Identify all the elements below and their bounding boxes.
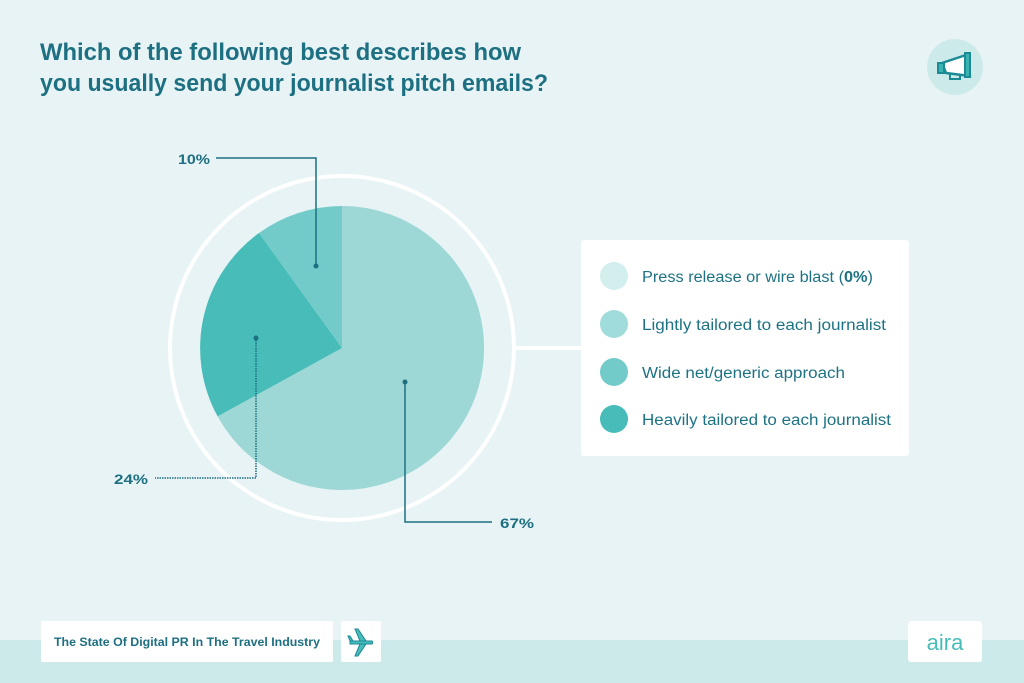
label: 67%: 67% <box>500 515 535 531</box>
label: 24%: 24% <box>114 471 149 487</box>
legend: Lightly tailored to each journalist <box>642 317 887 334</box>
label: 24% <box>114 336 258 487</box>
legend <box>581 240 909 456</box>
legend: Wide net/generic approach <box>642 365 845 382</box>
title: Which of the following best describes how <box>40 39 521 66</box>
pie chart <box>170 176 514 520</box>
label: 10%: 10% <box>178 151 211 167</box>
legend: Press release or wire blast ( 0%) <box>642 269 873 286</box>
title: you usually send your journalist pitch emails? <box>40 70 548 97</box>
legend: Heavily tailored to each journalist <box>642 412 892 429</box>
logo: aira <box>908 621 982 662</box>
icon: megaphone <box>927 39 983 95</box>
slice: heavily tailored 24% <box>200 233 342 416</box>
icon: plane <box>341 621 381 662</box>
logo: aira: aira <box>927 630 964 655</box>
title <box>40 39 548 97</box>
footer: report title: The State Of Digital PR In The Travel Industry <box>54 635 320 649</box>
label: 67% <box>402 380 535 531</box>
label: 10% <box>178 151 318 268</box>
connector to legend <box>514 346 582 350</box>
footer: report title <box>41 621 333 662</box>
slice: wide net 10% <box>259 206 342 348</box>
slice: lightly tailored 67% <box>218 206 484 490</box>
